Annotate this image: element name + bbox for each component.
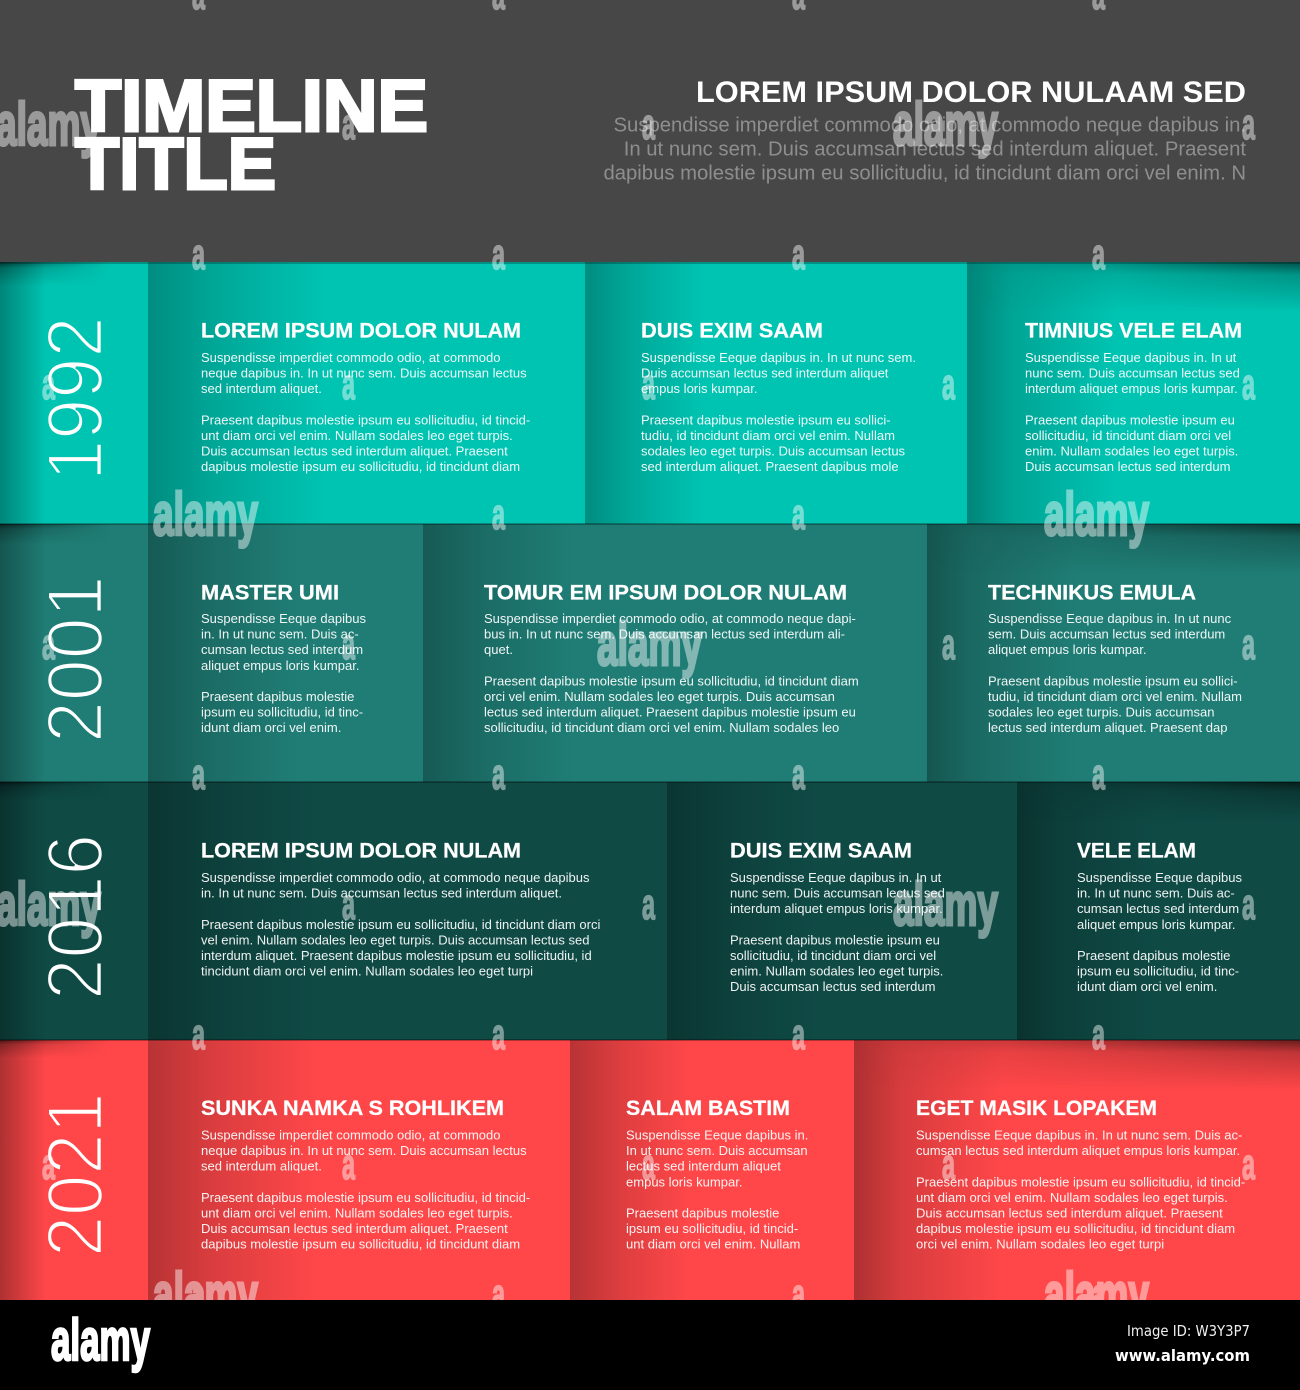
body text: aliquet empus loris kumpar. bbox=[1077, 917, 1235, 932]
row: 2001 bbox=[0, 523, 1300, 782]
watermarks: a bbox=[1242, 620, 1255, 669]
body text: aliquet empus loris kumpar. bbox=[988, 642, 1146, 657]
watermarks: a bbox=[492, 750, 505, 799]
body text: Praesent dapibus molestie ipsum eu sollici- bbox=[988, 673, 1238, 688]
image id: Image ID: W3Y3P7 bbox=[1127, 1322, 1250, 1340]
watermarks: alamy bbox=[1044, 1261, 1149, 1328]
watermarks: a bbox=[792, 1010, 805, 1059]
year 2021: 2021 bbox=[30, 1092, 119, 1257]
body text: sollicitudiu, id tincidunt diam orci vel bbox=[1025, 428, 1231, 443]
header subtitle: LOREM IPSUM DOLOR NULAAM SED bbox=[696, 76, 1246, 109]
body text: sollicitudiu, id tincidunt diam orci vel enim. Nullam sodales leo bbox=[484, 720, 839, 735]
heading: TECHNIKUS EMULA bbox=[988, 582, 1196, 604]
body text: bus in. In ut nunc sem. Duis accumsan lectus sed interdum ali- bbox=[484, 627, 845, 642]
watermarks: alamy bbox=[1044, 481, 1149, 548]
header description: Suspendisse imperdiet commodo odio, at commodo neque dapibus in. bbox=[614, 114, 1246, 136]
body text: idunt diam orci vel enim. bbox=[1077, 979, 1217, 994]
body text: Praesent dapibus molestie ipsum eu sollicitudiu, id tincid- bbox=[916, 1174, 1245, 1189]
body text: Praesent dapibus molestie ipsum eu sollicitudiu, id tincid- bbox=[201, 412, 530, 427]
body text: Suspendisse imperdiet commodo odio, at commodo bbox=[201, 1128, 501, 1142]
watermarks: alamy bbox=[153, 1261, 258, 1328]
body text: Praesent dapibus molestie ipsum eu sollicitudiu, id tincid- bbox=[201, 1190, 530, 1205]
panel: 2021 second bbox=[626, 1097, 808, 1252]
body text: Duis accumsan lectus sed interdum aliquet bbox=[641, 366, 889, 381]
panel: 2016 second bbox=[730, 840, 945, 994]
body text: enim. Nullam sodales leo eget turpis. bbox=[1025, 444, 1238, 459]
body text: Duis accumsan lectus sed interdum bbox=[730, 979, 935, 994]
body text: sodales leo eget turpis. Duis accumsan bbox=[988, 705, 1214, 720]
body text: sed interdum aliquet. bbox=[201, 381, 322, 396]
footer logo: alamy bbox=[51, 1308, 150, 1373]
body text: aliquet empus loris kumpar. bbox=[201, 658, 359, 673]
body text: Suspendisse Eeque dapibus in. In ut bbox=[730, 870, 942, 885]
body text: Duis accumsan lectus sed interdum aliquet. Praesent bbox=[916, 1206, 1223, 1220]
watermarks: a bbox=[1092, 1010, 1105, 1059]
panel: 2021 first bbox=[201, 1097, 530, 1252]
watermarks: a bbox=[192, 1010, 205, 1059]
watermarks: a bbox=[342, 620, 355, 669]
body text: orci vel enim. Nullam sodales leo eget turpis. Duis accumsan bbox=[484, 689, 835, 704]
body text: ipsum eu sollicitudiu, id tincid- bbox=[626, 1221, 798, 1236]
body text: empus loris kumpar. bbox=[626, 1174, 742, 1189]
watermarks: a bbox=[492, 1270, 505, 1319]
body text: In ut nunc sem. Duis accumsan bbox=[626, 1143, 808, 1158]
title: TITLE bbox=[75, 124, 276, 205]
heading: EGET MASIK LOPAKEM bbox=[916, 1097, 1157, 1120]
watermarks: alamy bbox=[893, 91, 998, 158]
body text: interdum aliquet empus loris kumpar. bbox=[730, 901, 943, 916]
watermarks: a bbox=[642, 360, 655, 409]
watermarks: a bbox=[42, 360, 55, 409]
watermarks: a bbox=[1092, 230, 1105, 279]
body text: Praesent dapibus molestie ipsum eu bbox=[730, 932, 940, 947]
body text: ipsum eu sollicitudiu, id tinc- bbox=[201, 705, 363, 720]
watermarks: a bbox=[792, 490, 805, 539]
body text: Praesent dapibus molestie bbox=[1077, 948, 1230, 963]
body text: Praesent dapibus molestie ipsum eu sollici- bbox=[641, 412, 891, 427]
panel: 2016 first bbox=[201, 840, 600, 979]
watermarks: a bbox=[1242, 360, 1255, 409]
body text: lectus sed interdum aliquet. Praesent dap bbox=[988, 720, 1228, 735]
watermarks: a bbox=[492, 230, 505, 279]
body text: sed interdum aliquet. Praesent dapibus mole bbox=[641, 459, 899, 474]
watermarks: a bbox=[642, 1140, 655, 1189]
body text: dapibus molestie ipsum eu sollicitudiu, id tincidunt diam bbox=[201, 1237, 520, 1252]
panel: 2001 third bbox=[988, 582, 1242, 735]
body text: dapibus molestie ipsum eu sollicitudiu, id tincidunt diam bbox=[201, 459, 520, 474]
body text: Praesent dapibus molestie ipsum eu sollicitudiu, id tincidunt diam orci bbox=[201, 917, 600, 932]
header band bbox=[0, 0, 1300, 262]
body text: ipsum eu sollicitudiu, id tinc- bbox=[1077, 964, 1239, 979]
panel: 2001 second bbox=[484, 582, 859, 735]
body text: Praesent dapibus molestie ipsum eu sollicitudiu, id tincidunt diam bbox=[484, 673, 859, 688]
panel: 1992 first bbox=[201, 320, 530, 474]
body text: interdum aliquet empus loris kumpar. bbox=[1025, 381, 1238, 396]
body text: Suspendisse Eeque dapibus bbox=[1077, 870, 1242, 885]
body text: orci vel enim. Nullam sodales leo eget turpi bbox=[916, 1237, 1164, 1252]
watermarks: a bbox=[942, 620, 955, 669]
year 1992: 1992 bbox=[30, 316, 119, 481]
header description: In ut nunc sem. Duis accumsan lectus sed interdum aliquet. Praesent bbox=[624, 138, 1246, 160]
watermarks: alamy bbox=[0, 91, 101, 158]
watermarks: a bbox=[792, 750, 805, 799]
body text: dapibus molestie ipsum eu sollicitudiu, id tincidunt diam bbox=[916, 1221, 1235, 1236]
body text: tudiu, id tincidunt diam orci vel enim. Nullam bbox=[641, 428, 895, 443]
body text: in. In ut nunc sem. Duis ac- bbox=[1077, 886, 1235, 901]
body text: neque dapibus in. In ut nunc sem. Duis accumsan lectus bbox=[201, 1143, 527, 1158]
body text: Suspendisse imperdiet commodo odio, at commodo neque dapi- bbox=[484, 611, 856, 626]
panel: 2001 first bbox=[201, 582, 366, 735]
body text: unt diam orci vel enim. Nullam sodales leo eget turpis. bbox=[916, 1190, 1228, 1205]
body text: in. In ut nunc sem. Duis accumsan lectus sed interdum aliquet. bbox=[201, 886, 562, 901]
heading: TIMNIUS VELE ELAM bbox=[1025, 320, 1242, 342]
watermarks: a bbox=[192, 230, 205, 279]
body text: Suspendisse Eeque dapibus in. In ut bbox=[1025, 350, 1237, 365]
panel: 1992 second bbox=[641, 320, 916, 474]
panel: 1992 third bbox=[1025, 320, 1242, 474]
watermarks: a bbox=[1242, 1140, 1255, 1189]
watermarks: a bbox=[192, 750, 205, 799]
body text: Suspendisse Eeque dapibus in. In ut nunc bbox=[988, 611, 1232, 626]
watermarks: a bbox=[642, 880, 655, 929]
watermarks: a bbox=[42, 620, 55, 669]
watermarks: a bbox=[792, 1270, 805, 1319]
body text: sollicitudiu, id tincidunt diam orci vel bbox=[730, 948, 936, 963]
body text: nunc sem. Duis accumsan lectus sed bbox=[1025, 366, 1240, 381]
body text: in. In ut nunc sem. Duis ac- bbox=[201, 627, 359, 642]
body text: Praesent dapibus molestie bbox=[201, 689, 354, 704]
watermarks: a bbox=[942, 1140, 955, 1189]
watermarks: alamy bbox=[153, 481, 258, 548]
body text: tudiu, id tincidunt diam orci vel enim. Nullam bbox=[988, 689, 1242, 704]
heading: TOMUR EM IPSUM DOLOR NULAM bbox=[484, 582, 847, 604]
body text: empus loris kumpar. bbox=[641, 381, 757, 396]
heading: LOREM IPSUM DOLOR NULAM bbox=[201, 320, 521, 342]
watermarks: a bbox=[1092, 1270, 1105, 1319]
body text: Praesent dapibus molestie ipsum eu bbox=[1025, 412, 1235, 427]
row: 2021 bbox=[0, 1039, 1300, 1300]
website: www.alamy.com bbox=[1115, 1346, 1250, 1365]
heading: DUIS EXIM SAAM bbox=[730, 840, 912, 862]
title: TIMELINE bbox=[75, 66, 428, 147]
watermarks: alamy bbox=[0, 871, 101, 938]
body text: sed interdum aliquet. bbox=[201, 1159, 322, 1174]
watermarks: a bbox=[492, 1010, 505, 1059]
body text: cumsan lectus sed interdum bbox=[201, 642, 363, 657]
panel: 2016 third bbox=[1077, 840, 1242, 994]
title bbox=[75, 66, 428, 205]
heading: VELE ELAM bbox=[1077, 840, 1196, 862]
body text: sem. Duis accumsan lectus sed interdum bbox=[988, 627, 1225, 642]
heading: DUIS EXIM SAAM bbox=[641, 320, 823, 342]
watermarks: alamy bbox=[893, 871, 998, 938]
watermarks: a bbox=[342, 100, 355, 149]
body text: Duis accumsan lectus sed interdum bbox=[1025, 459, 1230, 474]
watermarks: a bbox=[1092, 750, 1105, 799]
body text: Suspendisse imperdiet commodo odio, at commodo neque dapibus bbox=[201, 870, 590, 885]
watermarks: a bbox=[942, 360, 955, 409]
body text: neque dapibus in. In ut nunc sem. Duis accumsan lectus bbox=[201, 366, 527, 381]
watermarks: a bbox=[642, 100, 655, 149]
body text: nunc sem. Duis accumsan lectus sed bbox=[730, 886, 945, 901]
body text: Praesent dapibus molestie bbox=[626, 1206, 779, 1220]
body text: cumsan lectus sed interdum aliquet empus loris kumpar. bbox=[916, 1143, 1240, 1158]
body text: Suspendisse imperdiet commodo odio, at commodo bbox=[201, 350, 501, 365]
heading: SALAM BASTIM bbox=[626, 1097, 790, 1120]
body text: interdum aliquet. Praesent dapibus molestie ipsum eu sollicitudiu, id bbox=[201, 948, 592, 963]
body text: unt diam orci vel enim. Nullam sodales leo eget turpis. bbox=[201, 428, 513, 443]
watermarks: a bbox=[1242, 880, 1255, 929]
year 2016: 2016 bbox=[30, 834, 119, 1000]
heading: MASTER UMI bbox=[201, 582, 339, 604]
header description: dapibus molestie ipsum eu sollicitudiu, id tincidunt diam orci vel enim. N bbox=[603, 162, 1246, 184]
body text: unt diam orci vel enim. Nullam sodales leo eget turpis. bbox=[201, 1206, 513, 1220]
heading: SUNKA NAMKA S ROHLIKEM bbox=[201, 1097, 504, 1120]
footer bar bbox=[0, 1300, 1300, 1390]
watermarks: a bbox=[342, 360, 355, 409]
heading: LOREM IPSUM DOLOR NULAM bbox=[201, 840, 521, 862]
body text: unt diam orci vel enim. Nullam bbox=[626, 1237, 800, 1252]
watermarks: alamy bbox=[597, 611, 702, 678]
body text: vel enim. Nullam sodales leo eget turpis. Duis accumsan lectus sed bbox=[201, 932, 589, 947]
watermarks: a bbox=[192, 1270, 205, 1319]
body text: sodales leo eget turpis. Duis accumsan lectus bbox=[641, 444, 906, 459]
body text: Suspendisse Eeque dapibus in. In ut nunc sem. bbox=[641, 350, 916, 365]
row: 1992 bbox=[0, 262, 1300, 524]
watermarks: a bbox=[792, 230, 805, 279]
body text: Duis accumsan lectus sed interdum aliquet. Praesent bbox=[201, 1221, 508, 1236]
body text: lectus sed interdum aliquet. Praesent dapibus molestie ipsum eu bbox=[484, 705, 856, 720]
panel: 2021 third bbox=[916, 1097, 1245, 1252]
watermarks: a bbox=[492, 490, 505, 539]
body text: Suspendisse Eeque dapibus bbox=[201, 611, 366, 626]
watermarks: a bbox=[342, 880, 355, 929]
watermarks: a bbox=[42, 1140, 55, 1189]
body text: quet. bbox=[484, 642, 513, 657]
watermarks: a bbox=[342, 1140, 355, 1189]
body text: Duis accumsan lectus sed interdum aliquet. Praesent bbox=[201, 444, 508, 459]
body text: Suspendisse Eeque dapibus in. bbox=[626, 1128, 808, 1142]
body text: lectus sed interdum aliquet bbox=[626, 1159, 781, 1174]
year 2001: 2001 bbox=[30, 576, 119, 743]
body text: idunt diam orci vel enim. bbox=[201, 720, 341, 735]
body text: tincidunt diam orci vel enim. Nullam sodales leo eget turpi bbox=[201, 964, 533, 979]
body text: cumsan lectus sed interdum bbox=[1077, 901, 1239, 916]
row: 2016 bbox=[0, 781, 1300, 1040]
watermarks: a bbox=[1242, 100, 1255, 149]
body text: enim. Nullam sodales leo eget turpis. bbox=[730, 964, 943, 979]
body text: Suspendisse Eeque dapibus in. In ut nunc sem. Duis ac- bbox=[916, 1128, 1242, 1142]
